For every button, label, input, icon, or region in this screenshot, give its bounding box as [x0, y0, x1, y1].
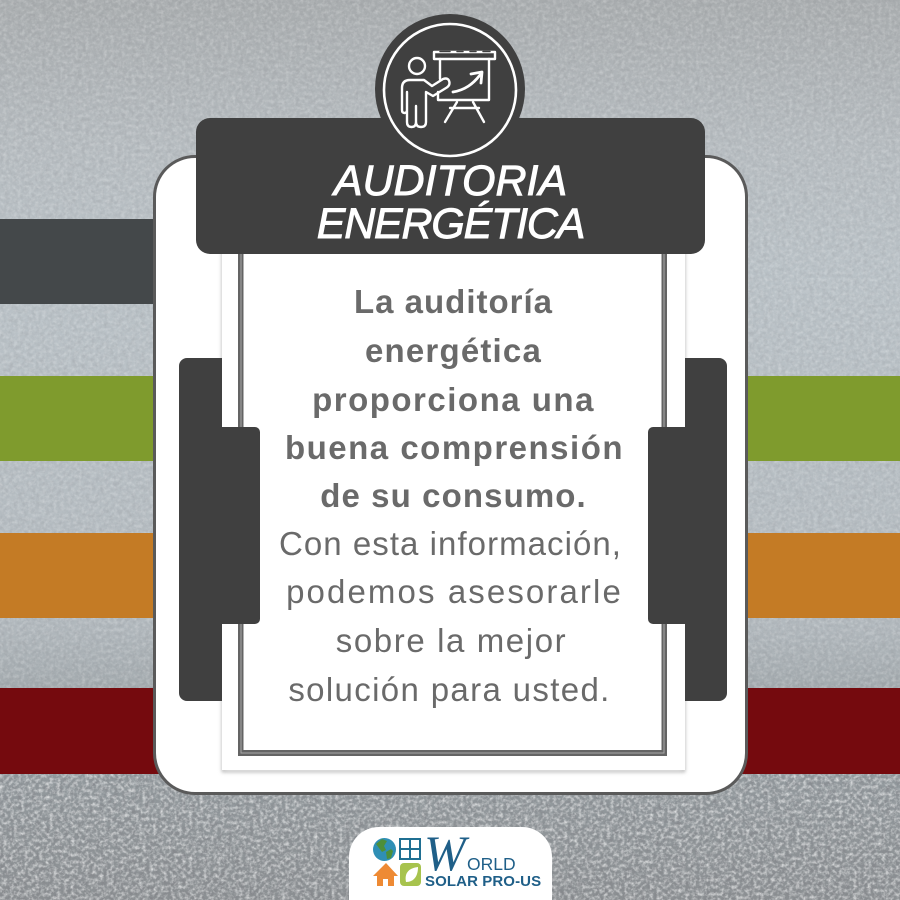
body text: sobre la mejor — [336, 622, 567, 659]
title: AUDITORIA — [334, 157, 567, 205]
right dark tabs — [648, 358, 727, 701]
body text: Con esta información, — [279, 525, 622, 562]
body text: de su consumo. — [320, 477, 587, 514]
body text: energética — [365, 332, 542, 369]
body text: solución para usted. — [288, 671, 611, 708]
icon: presenter with chart in circle — [375, 14, 525, 158]
wordmark: ORLD — [467, 854, 516, 874]
logo: World Solar Pro-US — [349, 827, 552, 900]
icon: leaf — [400, 863, 421, 886]
icon: globe — [373, 838, 396, 861]
panel: paper sheet with double frame — [220, 254, 688, 774]
title: ENERGÉTICA — [317, 200, 584, 248]
body text: proporciona una — [312, 381, 595, 418]
wordmark: SOLAR PRO-US — [425, 873, 541, 890]
panel: white rounded card — [153, 155, 748, 795]
body text: podemos asesorarle — [286, 573, 623, 610]
header banner — [196, 118, 705, 254]
body text: La auditoría — [354, 283, 553, 320]
icon: window — [400, 839, 420, 859]
body text: buena comprensión — [285, 429, 624, 466]
title — [317, 157, 584, 248]
left dark tabs — [179, 358, 260, 701]
icon: house — [373, 863, 398, 886]
